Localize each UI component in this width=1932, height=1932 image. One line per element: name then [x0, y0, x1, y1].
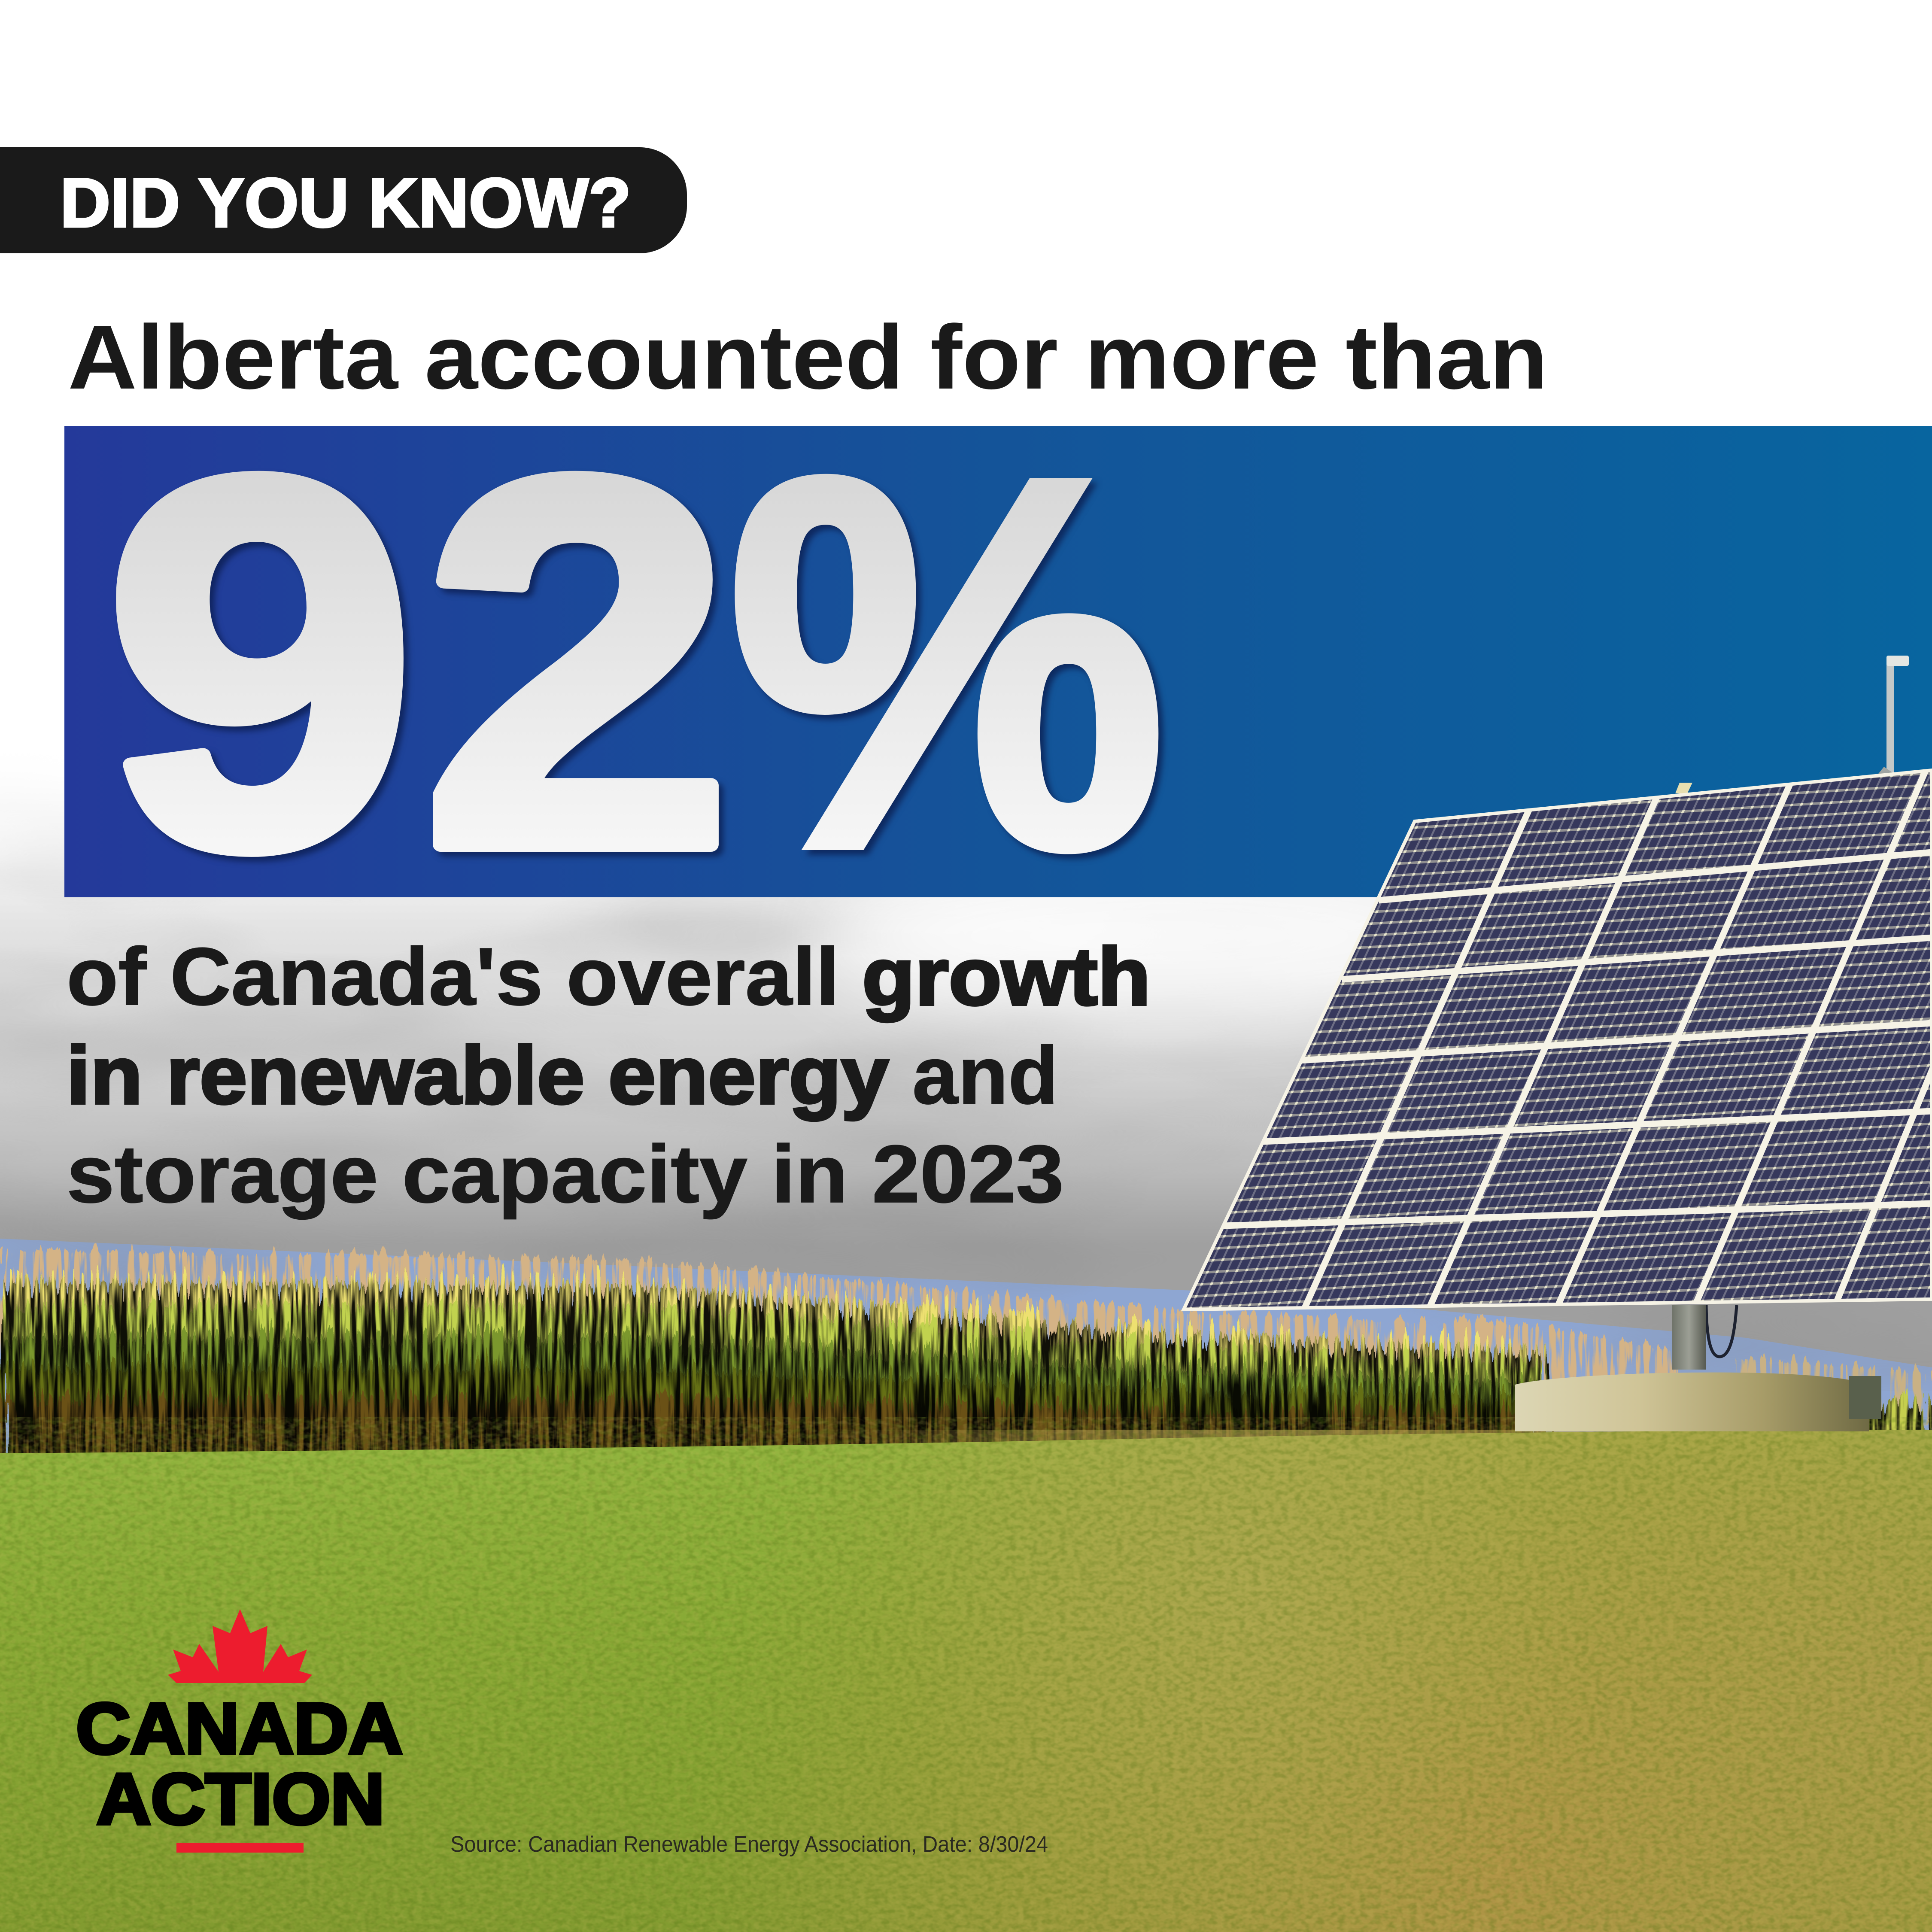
icon: red maple leaf — [168, 1609, 312, 1683]
did you know pill: DID YOU KNOW? — [60, 164, 631, 242]
big number 92%: 92 — [104, 370, 738, 956]
heading: Alberta accounted for more than — [68, 306, 1548, 408]
body statement — [67, 931, 1151, 1220]
body statement: growth — [862, 931, 1151, 1022]
antenna on panel — [1675, 656, 1909, 793]
body statement: of Canada's overall — [67, 931, 839, 1022]
logo: Canada Action: ACTION — [97, 1759, 385, 1839]
blue banner — [64, 426, 1932, 897]
source line: Source: Canadian Renewable Energy Association, Date: 8/30/24 — [450, 1832, 1048, 1857]
grass field — [0, 1430, 1932, 1932]
body statement: and — [912, 1030, 1058, 1121]
logo: Canada Action — [76, 1609, 403, 1853]
did you know pill — [0, 147, 687, 253]
big number 92%: % — [728, 370, 1166, 956]
icon: cables — [1706, 1305, 1737, 1357]
corn tassels — [0, 1252, 1932, 1425]
solar tracker base and pole — [1515, 1305, 1881, 1431]
body statement: in renewable energy — [67, 1030, 889, 1121]
cornfield — [0, 1282, 1932, 1477]
logo: Canada Action: CANADA — [76, 1688, 403, 1769]
body statement: storage capacity in 2023 — [67, 1129, 1064, 1220]
big number 92% — [104, 370, 1166, 956]
solar panel — [1184, 656, 1932, 1309]
